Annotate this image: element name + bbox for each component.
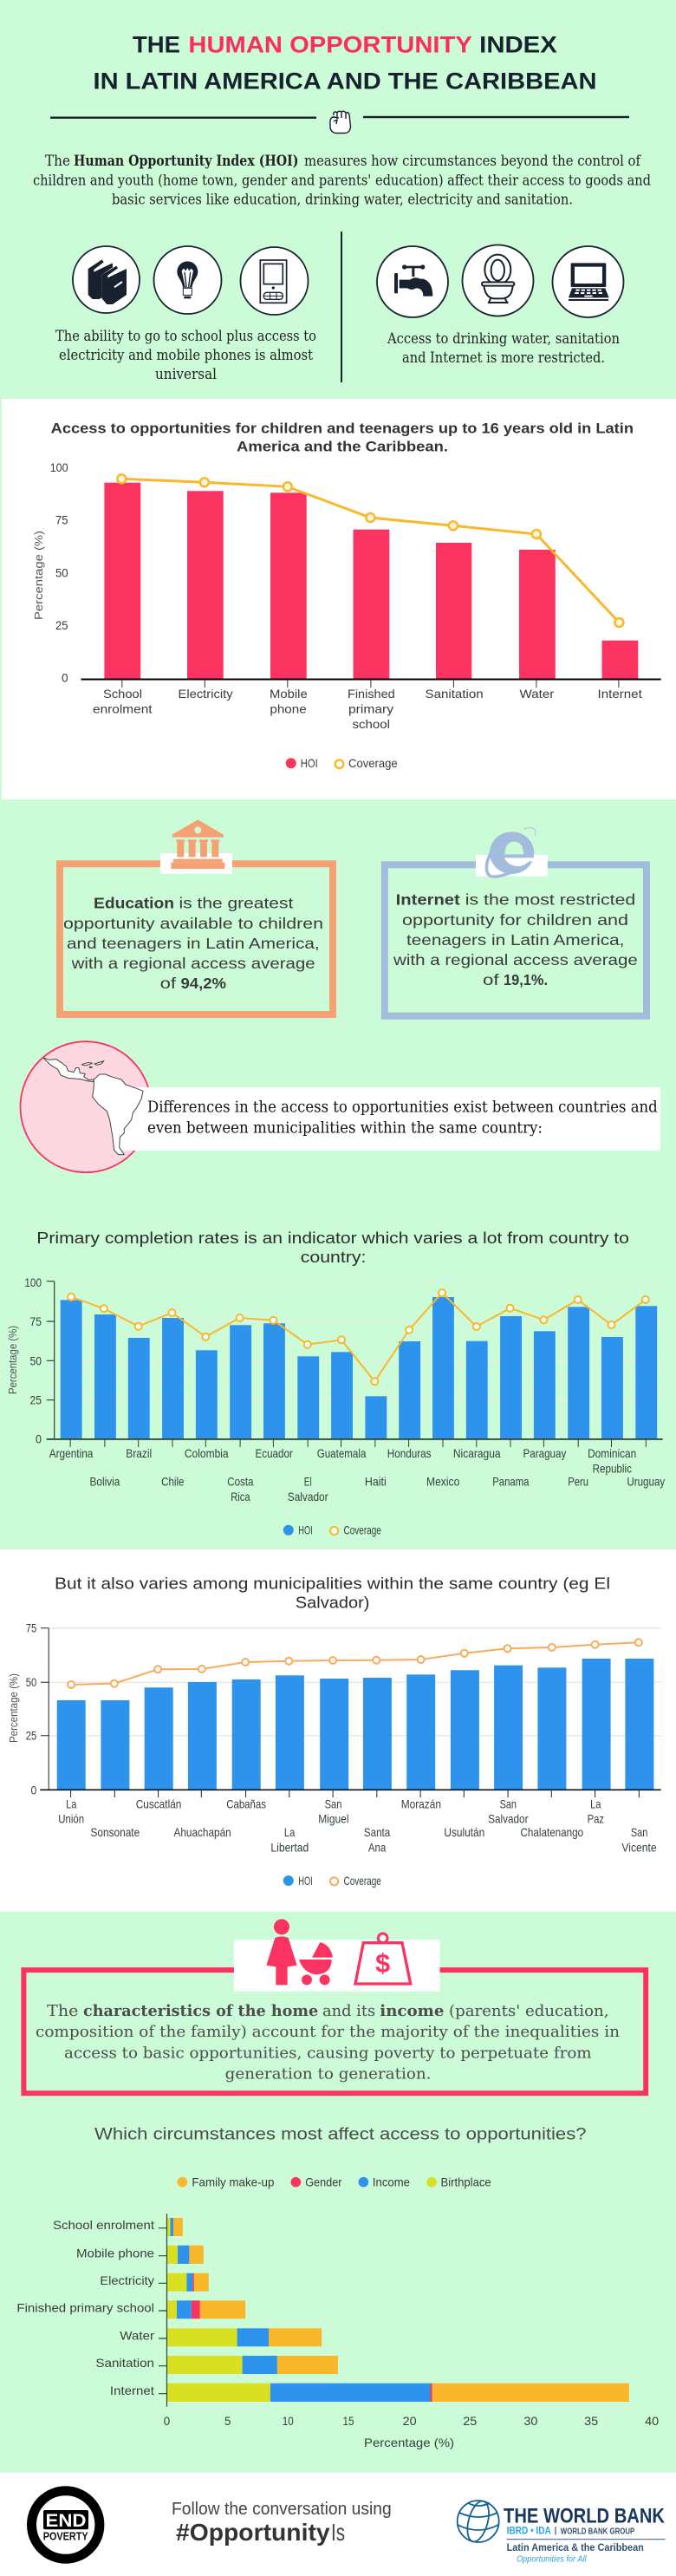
municipality labels: Unión [58,1812,84,1826]
HOI bars by municipality [57,1659,653,1790]
category labels: Water [520,687,555,701]
municipality labels: Miguel [318,1812,348,1826]
callout: internet [385,828,647,1016]
legend: HOI [301,756,318,770]
internet text: with a regional access average [393,951,638,968]
municipality labels: La [590,1797,601,1810]
y axis labels: Percentage (%) [7,1673,20,1743]
chart title [55,1575,610,1612]
characteristics text: characteristics of the home [83,2002,318,2020]
caption: universal access: universal [155,366,217,382]
country labels: El [304,1475,312,1489]
chart title: But it also varies among municipalities within the same country (eg El [55,1575,610,1593]
country labels: Peru [568,1475,588,1489]
y axis labels [6,1275,42,1446]
x axis labels: 30 [523,2414,538,2428]
axes [40,1628,661,1797]
category labels: Water [120,2328,154,2342]
logo: End Poverty: END [45,2511,87,2531]
y axis labels: 75 [29,1314,42,1328]
country labels: Salvador [288,1490,328,1503]
hashtag call to action: #Opportunity [176,2519,330,2546]
icon: map of Latin America [43,1058,143,1155]
characteristics text [36,2002,620,2083]
x axis labels: 35 [584,2414,598,2428]
legend: Coverage [343,1523,381,1537]
education text: Education [94,895,174,912]
municipality labels: Chalatenango [520,1825,583,1839]
country labels [49,1446,665,1503]
country labels: Dominican [588,1446,636,1460]
panel: municipalities chart [0,1549,676,1912]
caption: universal access: The ability to go to school plus access to [55,328,316,344]
coverage line [68,1289,649,1385]
country labels: Mexico [426,1475,459,1489]
internet text: Internet [396,891,460,909]
municipality labels: La [66,1797,77,1810]
title: INDEX [479,32,557,58]
differences text: even between municipalities within the same country: [147,1119,543,1137]
y axis labels: Percentage (%) [32,531,45,620]
municipality labels: Santa [364,1825,390,1839]
intro paragraph [33,153,651,207]
y axis labels: 25 [29,1393,42,1407]
characteristics text: and its [322,2002,375,2020]
chart title: Which circumstances most affect access to opportunities? [94,2126,587,2144]
category labels: Sanitation [425,687,484,701]
country labels: Nicaragua [453,1446,501,1460]
differences text [147,1099,658,1137]
x axis labels: 5 [224,2414,231,2428]
title [94,32,596,95]
intro paragraph: basic services like education, drinking water, electricity and sanitation. [112,191,573,207]
country labels: Rica [231,1490,250,1503]
category labels: Internet [110,2384,154,2397]
y axis labels [7,1621,36,1797]
characteristics text: access to basic opportunities, causing poverty to perpetuate from [64,2044,592,2062]
chart title: Primary completion rates is an indicator which varies a lot from country to [36,1229,629,1247]
category labels: Electricity [100,2273,154,2287]
axes [47,1281,663,1447]
legend: Coverage [343,1874,381,1888]
municipality labels: Usulután [444,1825,484,1839]
country labels: Ecuador [255,1446,293,1460]
caption: universal access [55,328,316,382]
internet text: of [483,971,499,988]
x axis labels: 25 [463,2414,478,2428]
chart title: America and the Caribbean. [237,438,448,454]
municipality labels: Sonsonate [90,1825,140,1839]
callout: education [60,819,333,1014]
icon: light bulb [154,246,222,314]
education text: opportunity available to children [63,915,323,932]
legend: Income [373,2175,410,2189]
icon: laptop [553,246,624,317]
education text [63,895,323,992]
legend [286,756,398,770]
country labels: Chile [161,1475,185,1489]
legend: Birthplace [440,2175,491,2189]
internet text: teenagers in Latin America, [406,931,624,949]
hashtag call to action: Is [331,2519,345,2546]
title: THE [133,32,180,58]
intro paragraph: measures how circumstances beyond the control of [304,153,642,169]
y axis labels: 75 [26,1621,36,1635]
municipality labels: Morazán [401,1797,441,1810]
education text: with a regional access average [70,955,315,972]
characteristics text: composition of the family) account for the majority of the inequalities in [36,2023,620,2041]
internet text [393,891,638,988]
category labels: Sanitation [95,2356,154,2370]
country labels: Guatemala [317,1446,367,1460]
HOI bars [104,483,638,679]
icon: bank building [171,819,224,869]
chart title: Salvador) [296,1595,369,1612]
country labels: Brazil [126,1446,152,1460]
panel: primary completion chart [6,1229,665,1537]
y axis labels: 25 [26,1729,36,1743]
stacked bars [166,2218,629,2402]
legend: Coverage [348,756,398,770]
category labels [93,687,642,731]
category labels: enrolment [93,701,153,715]
legend: HOI [298,1874,313,1888]
education text: of [160,975,176,992]
x axis labels: 10 [283,2414,294,2428]
municipality labels: Cabañas [226,1797,266,1810]
x axis labels: 15 [343,2414,354,2428]
category labels: primary [348,701,393,715]
caption: universal access: electricity and mobile phones is almost [59,347,313,363]
legend: HOI [298,1523,313,1537]
country labels: Argentina [49,1446,94,1460]
country labels: Colombia [185,1446,229,1460]
title: HUMAN OPPORTUNITY [188,32,472,58]
country labels: Republic [593,1461,632,1475]
x axis [81,678,661,688]
differences text: Differences in the access to opportunities exist between countries and [147,1099,658,1116]
municipality labels: San [631,1825,647,1839]
legend [178,2175,491,2189]
country labels: Paraguay [523,1446,566,1460]
characteristics text: generation to generation. [225,2064,432,2083]
characteristics text: (parents' education, [449,2002,608,2020]
y axis labels [32,460,68,685]
callout: differences with map [21,1041,660,1172]
category labels: School [103,687,142,701]
country labels: Bolivia [90,1475,120,1489]
logo: World Bank: IBRD • IDA [507,2527,551,2537]
category labels: Internet [598,687,642,701]
internet text: 19,1%. [504,971,548,988]
logo: End Poverty [31,2491,100,2559]
category labels: Mobile phone [76,2246,154,2260]
separator between access groups [341,232,342,382]
icon: faucet [377,246,448,317]
logo: World Bank: Latin America & the Caribbean [507,2541,644,2553]
hashtag call to action: Follow the conversation using [172,2500,392,2519]
internet text: opportunity for children and [402,911,628,929]
coverage line [68,1639,642,1688]
y axis labels: 75 [55,513,68,527]
y axis labels: 0 [36,1432,42,1446]
icon: mobile phone [241,247,309,315]
municipality labels: Vicente [621,1840,657,1854]
y axis labels: 25 [55,618,68,632]
category labels: Finished primary school [16,2301,154,2315]
x axis labels: Percentage (%) [364,2436,454,2449]
country labels: Panama [492,1475,530,1489]
y axis labels: 0 [31,1783,36,1797]
x axis labels: 40 [645,2414,659,2428]
footer [0,2473,676,2576]
caption: restricted access: and Internet is more restricted. [402,349,605,366]
x axis labels: 20 [403,2414,417,2428]
legend: Gender [305,2175,342,2189]
intro paragraph: The [45,153,70,169]
coverage line [117,474,623,627]
category labels: Mobile [270,687,308,701]
y axis labels: Percentage (%) [6,1326,19,1394]
municipality labels: San [325,1797,341,1810]
logo: End Poverty: POVERTY [43,2529,88,2542]
y axis labels: 50 [55,565,68,579]
chart title: country: [301,1249,366,1266]
hashtag call to action [172,2500,392,2546]
y axis labels: 100 [24,1275,42,1289]
municipality labels: Salvador [488,1812,529,1826]
title: IN LATIN AMERICA AND THE CARIBBEAN [94,68,596,95]
icon: toilet [463,245,534,316]
education text: and teenagers in Latin America, [67,935,320,952]
legend: Family make-up [192,2175,275,2189]
icon: internet browser [486,828,537,877]
internet text: is the most restricted [465,891,635,909]
chart title: Access to opportunities for children and teenagers up to 16 years old in Latin [51,420,634,436]
country labels: Uruguay [627,1475,665,1489]
category labels: school [352,717,390,731]
municipality labels: Paz [588,1812,604,1826]
municipality labels: Libertad [270,1840,309,1854]
x axis labels [164,2414,659,2449]
caption: restricted access [387,330,620,366]
category labels [16,2218,154,2397]
panel: opportunities chart [2,399,676,799]
country labels: Honduras [387,1446,432,1460]
logo: World Bank: Opportunities for All [517,2553,587,2564]
logo: World Bank [458,2499,666,2564]
intro paragraph: Human Opportunity Index (HOI) [74,153,298,169]
category labels: phone [270,701,307,715]
caption: restricted access: Access to drinking water, sanitation [387,330,620,347]
y axis labels: 100 [50,460,68,474]
chart title [51,420,634,454]
country labels: Haiti [365,1475,387,1489]
characteristics text: income [380,2002,444,2020]
y axis labels: 50 [29,1353,42,1367]
callout: characteristics of the home [23,1919,646,2093]
municipality labels: Ana [368,1840,386,1854]
education text: is the greatest [179,895,293,912]
icon: money weight [355,1934,411,1984]
category labels: School enrolment [53,2218,154,2232]
category labels: Finished [348,687,395,701]
icon: books [73,246,140,313]
legend [283,1523,381,1537]
y axis labels: 50 [26,1675,36,1689]
icon: mother with stroller [266,1919,333,1985]
municipality labels: Cuscatlán [136,1797,181,1810]
municipality labels: La [284,1825,295,1839]
municipality labels [58,1797,657,1854]
x axis labels: 0 [164,2414,170,2428]
education text: 94,2% [180,975,226,992]
HOI bars by country [61,1297,657,1439]
country labels: Costa [227,1475,254,1489]
municipality labels: Ahuachapán [173,1825,231,1839]
characteristics text: The [47,2002,78,2020]
axis [159,2214,166,2407]
municipality labels: San [500,1797,517,1810]
icon: money weight: $ [375,1948,390,1978]
logo: World Bank: WORLD BANK GROUP [561,2527,635,2537]
y axis labels: 0 [62,671,68,685]
panel: circumstances chart [16,2126,659,2449]
chart title [36,1229,629,1266]
divider with fist icon [50,111,629,134]
legend [283,1874,381,1888]
category labels: Electricity [179,687,233,701]
